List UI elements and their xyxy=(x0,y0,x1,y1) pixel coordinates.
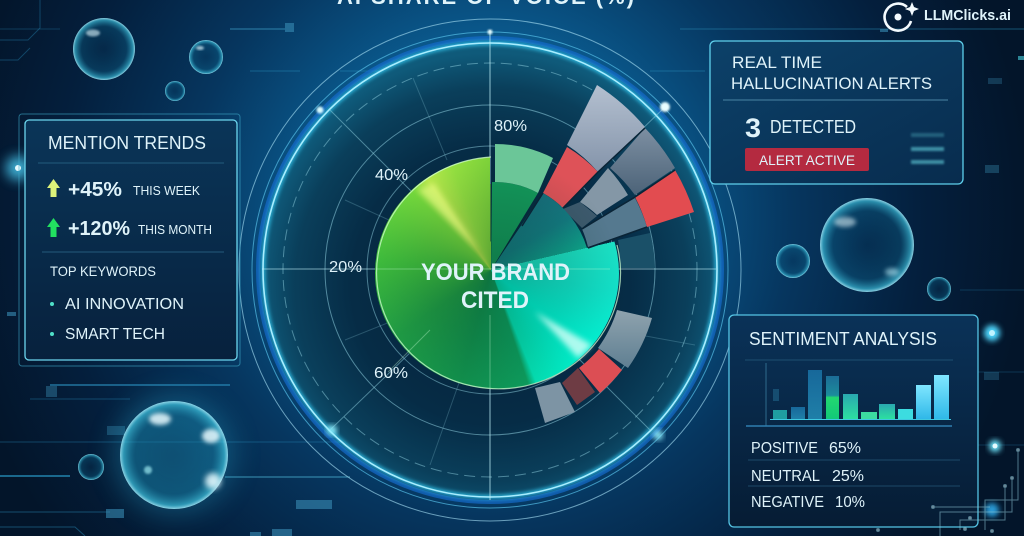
glowing node lights xyxy=(6,156,1001,517)
heading: REAL TIME xyxy=(732,53,822,72)
segment: slate upper xyxy=(610,128,675,195)
bubble right tiny xyxy=(927,277,951,301)
segment: dark slate xyxy=(563,202,597,228)
bubble right small xyxy=(776,244,810,278)
segment: mid grey xyxy=(580,168,628,215)
axis label 60%: 60% xyxy=(374,365,408,382)
negative row: 10% xyxy=(835,494,865,511)
positive row: POSITIVE xyxy=(751,440,818,457)
segment: slate blue xyxy=(582,198,647,247)
heading: MENTION TRENDS xyxy=(48,133,206,153)
positive row xyxy=(751,440,861,457)
neutral row: 25% xyxy=(832,468,864,485)
heading: SENTIMENT ANALYSIS xyxy=(749,329,937,349)
detected count: DETECTED xyxy=(770,117,856,137)
panel: mention trends xyxy=(19,114,240,366)
keyword item: AI INNOVATION xyxy=(65,296,184,313)
icon: logo mark xyxy=(885,2,919,31)
alert badge: ALERT ACTIVE xyxy=(759,152,855,168)
center label: CITED xyxy=(461,287,529,314)
panel frame xyxy=(19,114,240,366)
teal sector xyxy=(491,193,587,270)
segment: red right xyxy=(635,170,694,227)
detected count xyxy=(745,113,856,143)
bar chart xyxy=(746,363,952,426)
disk rim xyxy=(377,157,621,389)
segment: grey top xyxy=(567,85,645,172)
cyan light streak xyxy=(535,312,592,358)
neutral row xyxy=(751,468,864,485)
icon: green up arrow xyxy=(47,218,60,237)
monthly stat: +120% xyxy=(68,218,130,240)
axis label 40%: 40% xyxy=(375,167,408,184)
bubbles xyxy=(73,18,951,515)
bubble lower left small xyxy=(78,454,104,480)
detected count: 3 xyxy=(745,113,761,143)
ring sparkles xyxy=(316,30,670,440)
weekly stat: THIS WEEK xyxy=(133,183,200,198)
light green segment xyxy=(495,144,553,193)
logo xyxy=(885,2,1011,31)
monthly stat xyxy=(68,218,212,240)
disk center shading xyxy=(375,157,619,389)
lower right circuit traces xyxy=(876,448,1020,536)
panel frame xyxy=(729,315,978,527)
positive row: 65% xyxy=(829,440,861,457)
bubble top tiny xyxy=(165,81,185,101)
grid rings and spokes xyxy=(262,30,716,500)
axis label 80%: 80% xyxy=(494,118,527,135)
radar dial xyxy=(239,19,741,521)
panel: sentiment analysis xyxy=(729,315,978,527)
panel frame xyxy=(710,41,963,184)
segment: red lower xyxy=(579,349,622,393)
axis label 20%: 20% xyxy=(329,259,362,276)
main green and cyan disk xyxy=(373,155,621,391)
outer rings xyxy=(239,19,741,521)
panel: hallucination alerts xyxy=(710,41,963,184)
segment: grey bottom xyxy=(535,382,575,423)
subheading: TOP KEYWORDS xyxy=(50,263,156,279)
negative row xyxy=(751,494,865,511)
bubble top left large xyxy=(73,18,135,80)
segment: dark red lower xyxy=(562,368,595,405)
icon: yellow up arrow xyxy=(47,179,60,197)
segment: red upper xyxy=(543,147,598,208)
bubble top small xyxy=(189,40,223,74)
weekly stat: +45% xyxy=(68,179,122,201)
segment separators xyxy=(522,128,675,248)
center label xyxy=(421,259,570,314)
monthly stat: THIS MONTH xyxy=(138,222,212,237)
neutral row: NEUTRAL xyxy=(751,468,820,485)
dark teal band xyxy=(618,233,655,268)
alert badge xyxy=(745,148,869,171)
keyword item: SMART TECH xyxy=(65,326,165,343)
center label: YOUR BRAND xyxy=(421,259,570,286)
heading: HALLUCINATION ALERTS xyxy=(731,74,932,93)
weekly stat xyxy=(68,179,200,201)
bubble lower left large xyxy=(114,395,234,515)
dark green sector xyxy=(491,182,538,270)
brand name: LLMClicks.ai xyxy=(924,7,1011,24)
bubble right large xyxy=(820,198,914,292)
negative row: NEGATIVE xyxy=(751,494,824,511)
lime light streak xyxy=(418,183,478,250)
disk crosshair xyxy=(376,269,610,388)
small data bars xyxy=(911,133,944,164)
heading xyxy=(731,53,932,93)
segment: grey lower right xyxy=(598,310,652,368)
